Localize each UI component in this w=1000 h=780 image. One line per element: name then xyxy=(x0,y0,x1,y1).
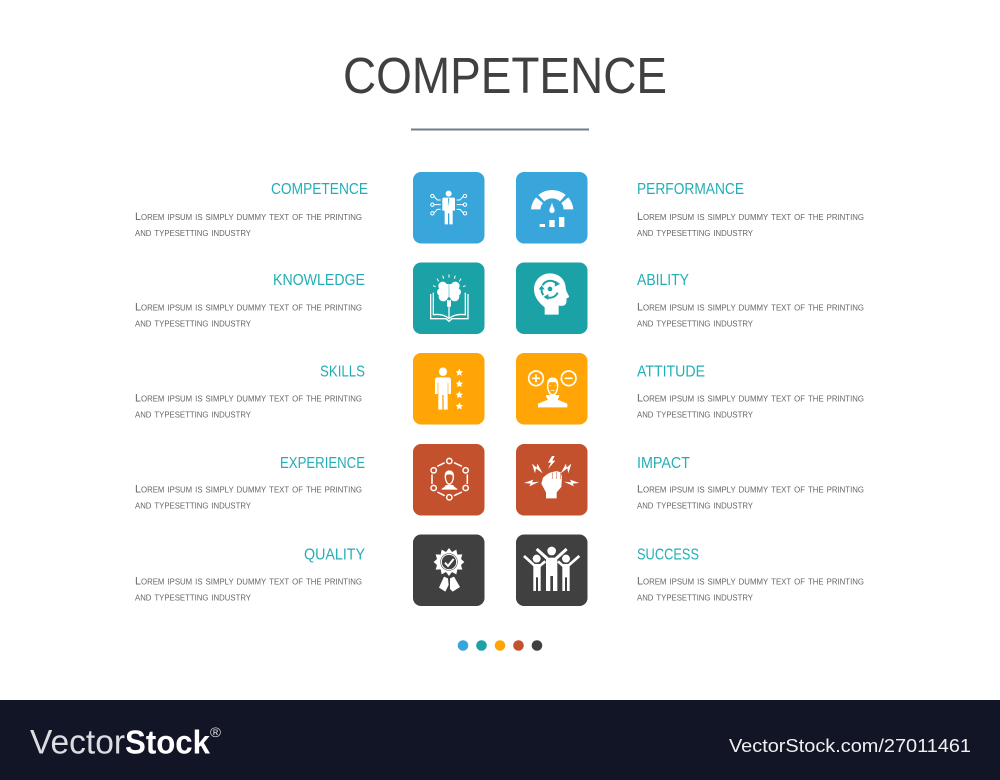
footer image id: VectorStock.com/27011461 xyxy=(729,735,971,756)
left text block: quality xyxy=(135,546,365,604)
right text block: impact: and typesetting industry xyxy=(637,500,754,512)
icon: fist with lightning bolts xyxy=(524,456,579,498)
icon: person with circuit nodes xyxy=(431,191,467,224)
icon: three people cheering xyxy=(524,547,579,591)
right text block: impact xyxy=(637,455,864,512)
left text block: knowledge: Lorem ipsum is simply dummy text of the printing xyxy=(135,302,362,314)
left text block: skills xyxy=(135,364,365,420)
right text block: ability: and typesetting industry xyxy=(637,318,754,330)
footer bar xyxy=(0,700,1000,780)
left text block: knowledge xyxy=(135,272,365,330)
right text block: ability: ABILITY xyxy=(637,272,689,289)
left text block: competence: and typesetting industry xyxy=(135,227,252,239)
tile: competence xyxy=(413,172,484,244)
left text block: competence: Lorem ipsum is simply dummy text of the printing xyxy=(135,211,362,223)
right text block: attitude xyxy=(637,364,864,420)
right text block: success: and typesetting industry xyxy=(637,592,754,604)
left text block: knowledge: KNOWLEDGE xyxy=(273,272,365,289)
icon: person with four stars xyxy=(435,367,463,410)
left text block: skills: SKILLS xyxy=(320,364,365,380)
right text block: performance: Lorem ipsum is simply dummy text of the printing xyxy=(637,211,864,223)
right text block: ability: Lorem ipsum is simply dummy text of the printing xyxy=(637,302,864,314)
tile: skills xyxy=(413,353,484,424)
icon: brain over open book xyxy=(431,274,468,321)
right text block: attitude: and typesetting industry xyxy=(637,408,754,420)
icon: gauge with drop and bars xyxy=(531,190,573,227)
right text block: success: Lorem ipsum is simply dummy text of the printing xyxy=(637,576,864,588)
icon: person in ring of nodes xyxy=(431,458,468,500)
left text block: skills: Lorem ipsum is simply dummy text of the printing xyxy=(135,392,362,404)
left text block: skills: and typesetting industry xyxy=(135,408,252,420)
left text block: experience: EXPERIENCE xyxy=(280,455,365,472)
tile: ability xyxy=(516,262,588,334)
left text block: quality: and typesetting industry xyxy=(135,592,252,604)
left text block: experience: and typesetting industry xyxy=(135,500,252,512)
right text block: impact: Lorem ipsum is simply dummy text of the printing xyxy=(637,484,864,496)
right text block: attitude: ATTITUDE xyxy=(637,364,705,380)
tile: quality xyxy=(413,534,484,606)
left text block: competence xyxy=(135,181,368,239)
right text block: performance xyxy=(637,181,864,239)
right text block: performance: PERFORMANCE xyxy=(637,181,744,198)
left text block: competence: COMPETENCE xyxy=(271,181,368,198)
footer logo: Stock xyxy=(125,724,211,760)
footer logo xyxy=(30,724,222,762)
tile: performance xyxy=(516,172,588,244)
footer logo: ® xyxy=(210,724,222,740)
tile: impact xyxy=(516,444,588,516)
left text block: quality: QUALITY xyxy=(304,546,365,564)
icon: award rosette with check xyxy=(434,548,464,592)
left text block: experience xyxy=(135,455,365,512)
title: COMPETENCE xyxy=(343,47,667,104)
right text block: performance: and typesetting industry xyxy=(637,227,754,239)
tile: attitude xyxy=(516,353,588,424)
footer logo: Vector xyxy=(30,724,125,762)
left text block: quality: Lorem ipsum is simply dummy text of the printing xyxy=(135,576,362,588)
icon: head with rotating arrows xyxy=(534,273,569,315)
right text block: attitude: Lorem ipsum is simply dummy text of the printing xyxy=(637,392,864,404)
right text block: success: SUCCESS xyxy=(637,546,699,564)
right text block: success xyxy=(637,546,864,604)
right text block: ability xyxy=(637,272,864,330)
pagination dots xyxy=(458,640,542,651)
left text block: experience: Lorem ipsum is simply dummy text of the printing xyxy=(135,484,362,496)
tile: success xyxy=(516,534,588,606)
tile: knowledge xyxy=(413,262,484,334)
icon: person with plus and minus xyxy=(529,371,576,407)
right text block: impact: IMPACT xyxy=(637,455,690,472)
tile: experience xyxy=(413,444,484,516)
left text block: knowledge: and typesetting industry xyxy=(135,318,252,330)
